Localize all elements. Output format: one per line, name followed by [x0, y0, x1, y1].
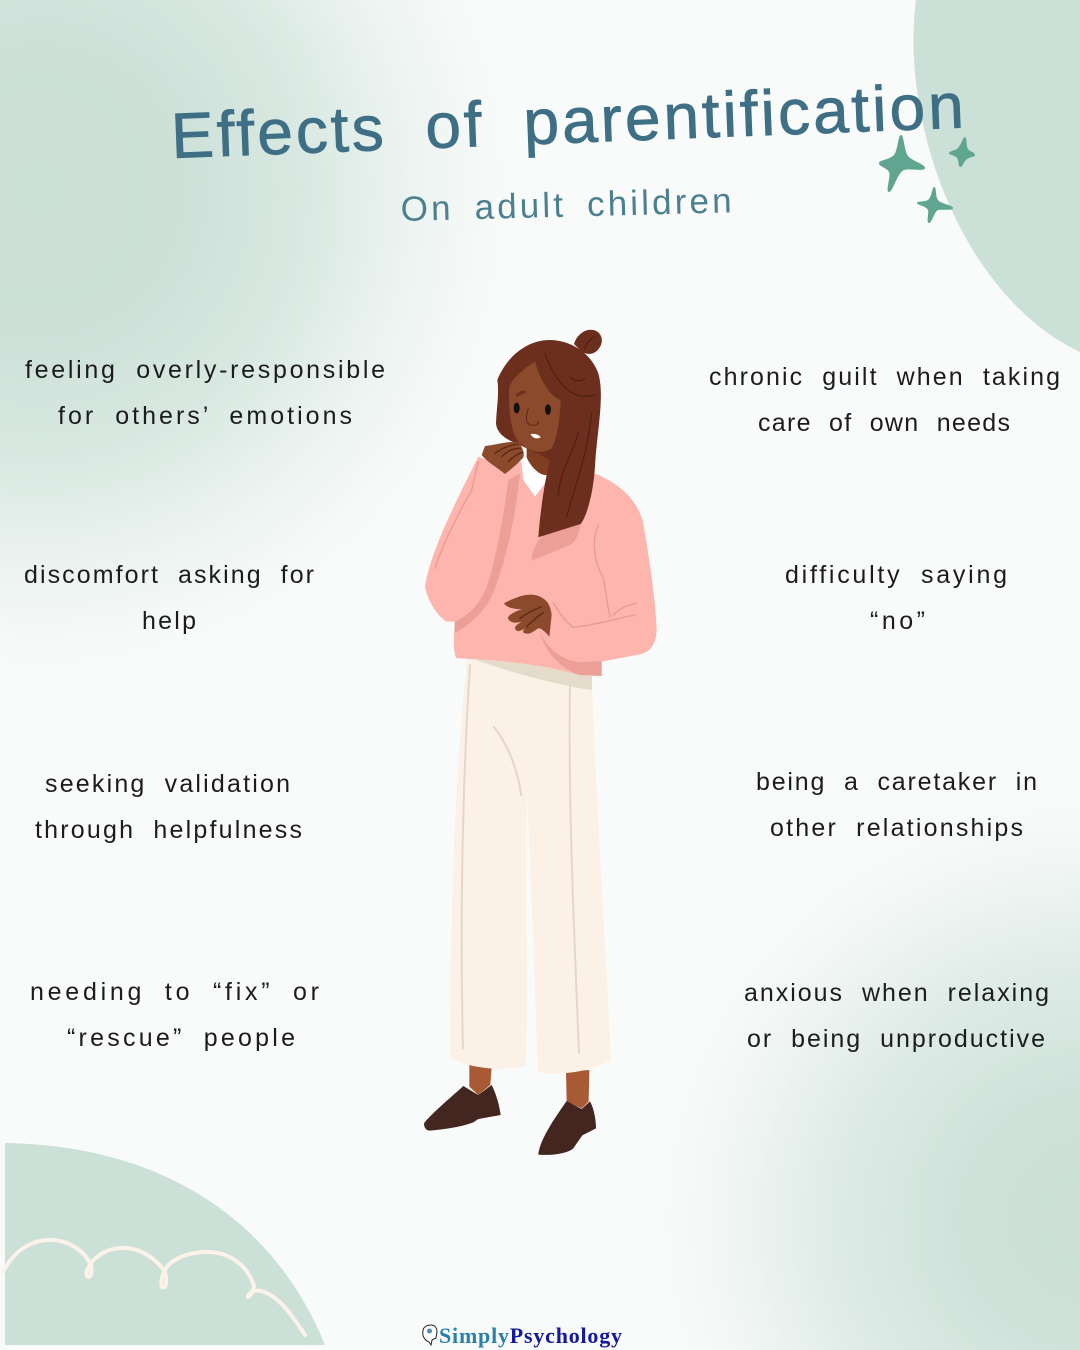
effect: overly responsible: [25, 356, 385, 430]
background: bottom-right soft mint glow: [640, 790, 1080, 1350]
torso and sweater: [425, 330, 657, 676]
effect: needing to fix or rescue: [30, 978, 319, 1052]
icon: sparkles: [879, 135, 975, 223]
effect: chronic guilt: [709, 363, 1060, 437]
effect: chronic guilt: care of own needs: [758, 409, 1010, 437]
title: Effects of parentification: [170, 70, 965, 172]
trousers: [450, 655, 611, 1074]
effect: discomfort asking for help: help: [142, 607, 196, 635]
wordmark: SimplyPsychology: [439, 1323, 622, 1348]
effect: discomfort asking for help: [24, 561, 314, 635]
hair back: [496, 340, 601, 537]
effect: difficulty saying no: “no”: [870, 607, 925, 635]
legs and shoes: [424, 1063, 596, 1155]
right column: effects: [709, 363, 1060, 1053]
effect: seeking validation: [35, 770, 302, 844]
effect: needing to fix or rescue: needing to “fix” or: [30, 978, 319, 1006]
bun: [574, 330, 602, 354]
background: top-left soft mint glow: [0, 0, 520, 700]
effect: anxious when relaxing: or being unproductive: [747, 1025, 1045, 1053]
effect: needing to fix or rescue: “rescue” people: [67, 1024, 295, 1052]
hair strands: [545, 353, 595, 517]
effect: overly responsible: feeling overly-responsible: [25, 356, 385, 384]
effect: overly responsible: for others’ emotions: [58, 402, 352, 430]
neck and collar: [521, 457, 553, 497]
effect: difficulty saying no: difficulty saying: [785, 561, 1007, 589]
effect: seeking validation: seeking validation: [45, 770, 290, 798]
effect: caretaker: [756, 768, 1037, 842]
effect: anxious when relaxing: [744, 979, 1049, 1053]
shape: top-right mint blob: [913, 0, 1080, 352]
effect: chronic guilt: chronic guilt when taking: [709, 363, 1060, 391]
effect: caretaker: being a caretaker in: [756, 768, 1037, 796]
effect: anxious when relaxing: anxious when relaxing: [744, 979, 1049, 1007]
left column: effects: [24, 356, 385, 1052]
face: [509, 362, 561, 452]
effect: seeking validation: through helpfulness: [35, 816, 302, 844]
effect: discomfort asking for help: discomfort asking for: [24, 561, 314, 589]
shape: bottom-left mint blob with cloud line: [3, 1143, 325, 1345]
raised hand: [482, 442, 524, 474]
illustration: woman thinking: [424, 330, 657, 1155]
lower hand: [504, 595, 552, 637]
icon: head: [423, 1325, 437, 1345]
effect: difficulty saying no: [785, 561, 1007, 635]
effect: caretaker: other relationships: [770, 814, 1023, 842]
logo: Simply Psychology: [423, 1323, 622, 1348]
subtitle: On adult children: [400, 181, 732, 229]
